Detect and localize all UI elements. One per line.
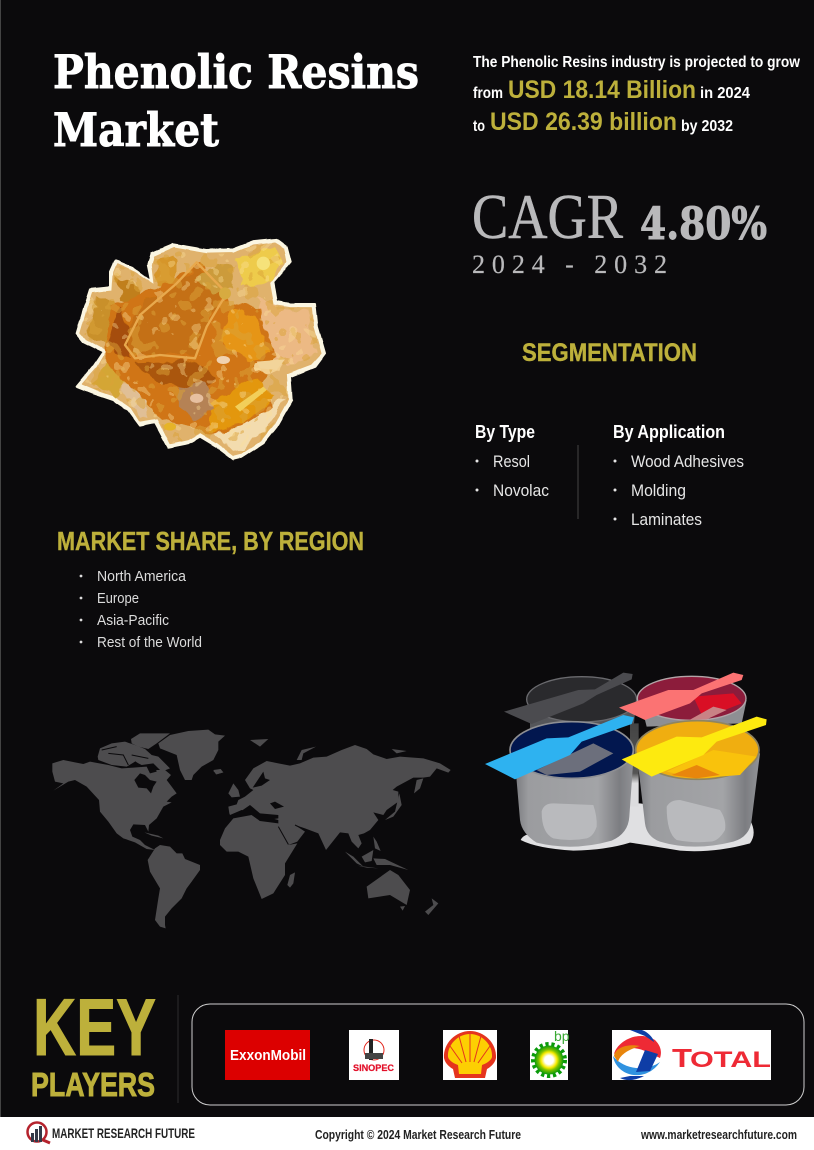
market projection text: USD 18.14 Billion: [508, 76, 696, 104]
segment list: by application: By Application: [613, 422, 725, 442]
segmentation heading: SEGMENTATION: [522, 339, 697, 367]
logo: Shell: [443, 1030, 497, 1080]
key players heading: [31, 983, 156, 1103]
footer: MARKET RESEARCH FUTURE: [52, 1125, 195, 1141]
segment list: by type: Resol: [493, 452, 530, 471]
region list: North America: [97, 568, 187, 585]
footer: [0, 1117, 814, 1150]
logo: BP: [530, 1028, 570, 1080]
footer: Copyright © 2024 Market Research Future: [315, 1127, 521, 1142]
segment list: by type: By Type: [475, 422, 535, 442]
market projection text: from: [473, 85, 503, 102]
market projection text: USD 26.39 billion: [490, 108, 677, 136]
market projection text: in 2024: [700, 85, 750, 102]
key players heading: KEY: [33, 983, 156, 1073]
logo: BP: bp: [554, 1028, 570, 1044]
CAGR: 4.80%: [640, 199, 767, 250]
segment list: by application: [613, 422, 744, 529]
CAGR: CAGR: [472, 182, 623, 252]
back right can: [640, 700, 747, 727]
front left can: [514, 750, 634, 847]
market projection text: to: [473, 118, 485, 135]
segment list: by type: Novolac: [493, 481, 549, 500]
dark scraper: [504, 673, 633, 724]
market projection text: [473, 54, 801, 136]
region list: Asia-Pacific: [97, 612, 169, 629]
title: Market: [53, 103, 220, 157]
logo: Total: T: [672, 1043, 692, 1073]
map: Europe, Asia, Africa, Oceania: [213, 739, 451, 915]
logo: ExxonMobil: ExxonMobil: [230, 1047, 306, 1064]
logo: Sinopec: SINOPEC: [353, 1063, 394, 1074]
CAGR: [472, 182, 767, 279]
blue scraper: [485, 715, 634, 779]
logo icon: market research future: [28, 1122, 50, 1143]
white base shadow: [521, 803, 754, 851]
resin crystal image: [77, 239, 325, 459]
segment list: by application: Wood Adhesives: [631, 452, 744, 471]
segment list: by type: [475, 422, 549, 500]
CAGR: 2024 - 2032: [472, 250, 667, 279]
segment list: by application: Molding: [631, 481, 686, 500]
front right can: [637, 753, 760, 847]
map: Americas and Greenland: [52, 730, 225, 928]
title: Phenolic Resins: [53, 45, 419, 99]
red scraper: [619, 673, 743, 720]
key players panel: [192, 1004, 804, 1105]
world map: [52, 730, 451, 928]
region list: Rest of the World: [97, 634, 202, 651]
logo: Total: OTAL: [690, 1047, 771, 1072]
region list: [80, 568, 202, 651]
market projection text: by 2032: [681, 118, 733, 135]
logo: Sinopec: [349, 1030, 399, 1080]
segment list: by application: Laminates: [631, 510, 702, 529]
logo: Total: [612, 1030, 771, 1080]
back left can: [530, 697, 637, 730]
region list: Europe: [97, 590, 139, 607]
key players heading: PLAYERS: [31, 1066, 155, 1103]
paint cans image: [485, 673, 767, 851]
logo: ExxonMobil: [225, 1030, 310, 1080]
yellow scraper: [622, 717, 767, 777]
title: [53, 45, 419, 157]
market share heading: MARKET SHARE, BY REGION: [57, 526, 364, 556]
